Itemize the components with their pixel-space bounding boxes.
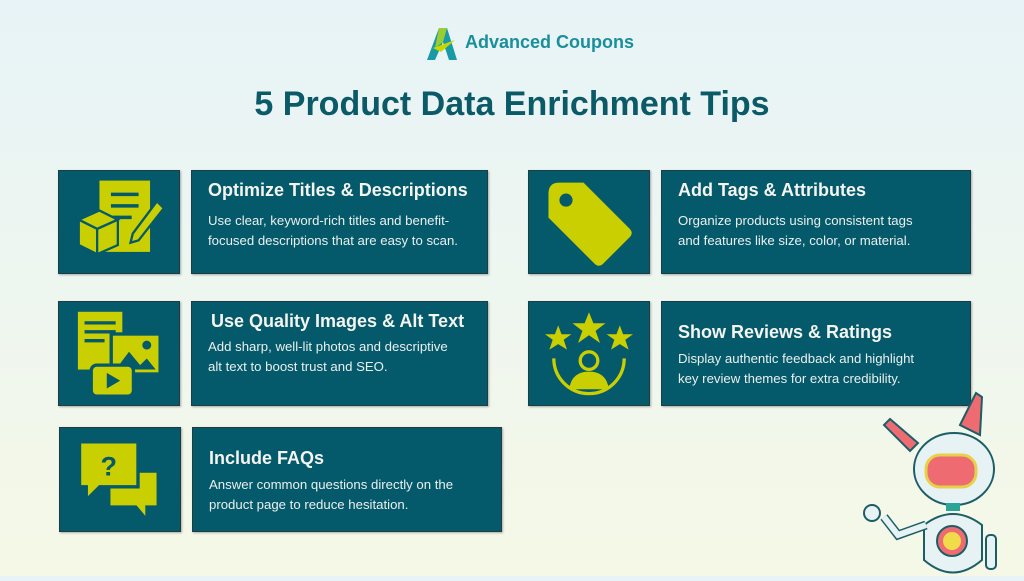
text: reviews: Show Reviews & Ratings (678, 322, 892, 342)
text: tags: and features like size, color, or material. (678, 233, 910, 248)
icon: tag (528, 170, 650, 274)
text: faqs (192, 427, 502, 532)
icon: speech bubbles (59, 427, 181, 532)
text: optimize titles (191, 170, 488, 274)
robot mascot (863, 392, 997, 574)
card: images (58, 300, 490, 408)
card: optimize titles (58, 170, 490, 276)
text: faqs: Answer common questions directly on the (209, 477, 453, 492)
icon: speech bubbles: ? (100, 451, 117, 481)
title: 5 Product Data Enrichment Tips (254, 85, 770, 123)
text: tags: Organize products using consistent tags (678, 213, 913, 228)
text: reviews: Display authentic feedback and highlight (678, 351, 914, 366)
icon: document box pencil (58, 170, 180, 274)
text: faqs: product page to reduce hesitation. (209, 497, 408, 512)
text: tags (661, 170, 971, 274)
icon: stars person (528, 301, 650, 406)
card: tags (528, 170, 974, 276)
text: images (191, 301, 488, 406)
text: tags: Add Tags & Attributes (678, 180, 866, 200)
text: faqs: Include FAQs (209, 448, 324, 468)
logo: Advanced Coupons (465, 32, 634, 52)
card: faqs (58, 426, 504, 534)
text: images: Add sharp, well-lit photos and descriptive (208, 339, 448, 354)
text: reviews: key review themes for extra credibility. (678, 371, 901, 386)
text: reviews (661, 301, 971, 406)
logo (427, 28, 634, 60)
text: images: Use Quality Images & Alt Text (211, 311, 464, 331)
icon: images (58, 301, 180, 406)
card: reviews (528, 300, 974, 408)
text: optimize titles: focused descriptions that are easy to scan. (208, 233, 458, 248)
text: images: alt text to boost trust and SEO. (208, 359, 388, 374)
text: optimize titles: Use clear, keyword-rich titles and benefit- (208, 213, 449, 228)
text: optimize titles: Optimize Titles & Descriptions (208, 180, 468, 200)
